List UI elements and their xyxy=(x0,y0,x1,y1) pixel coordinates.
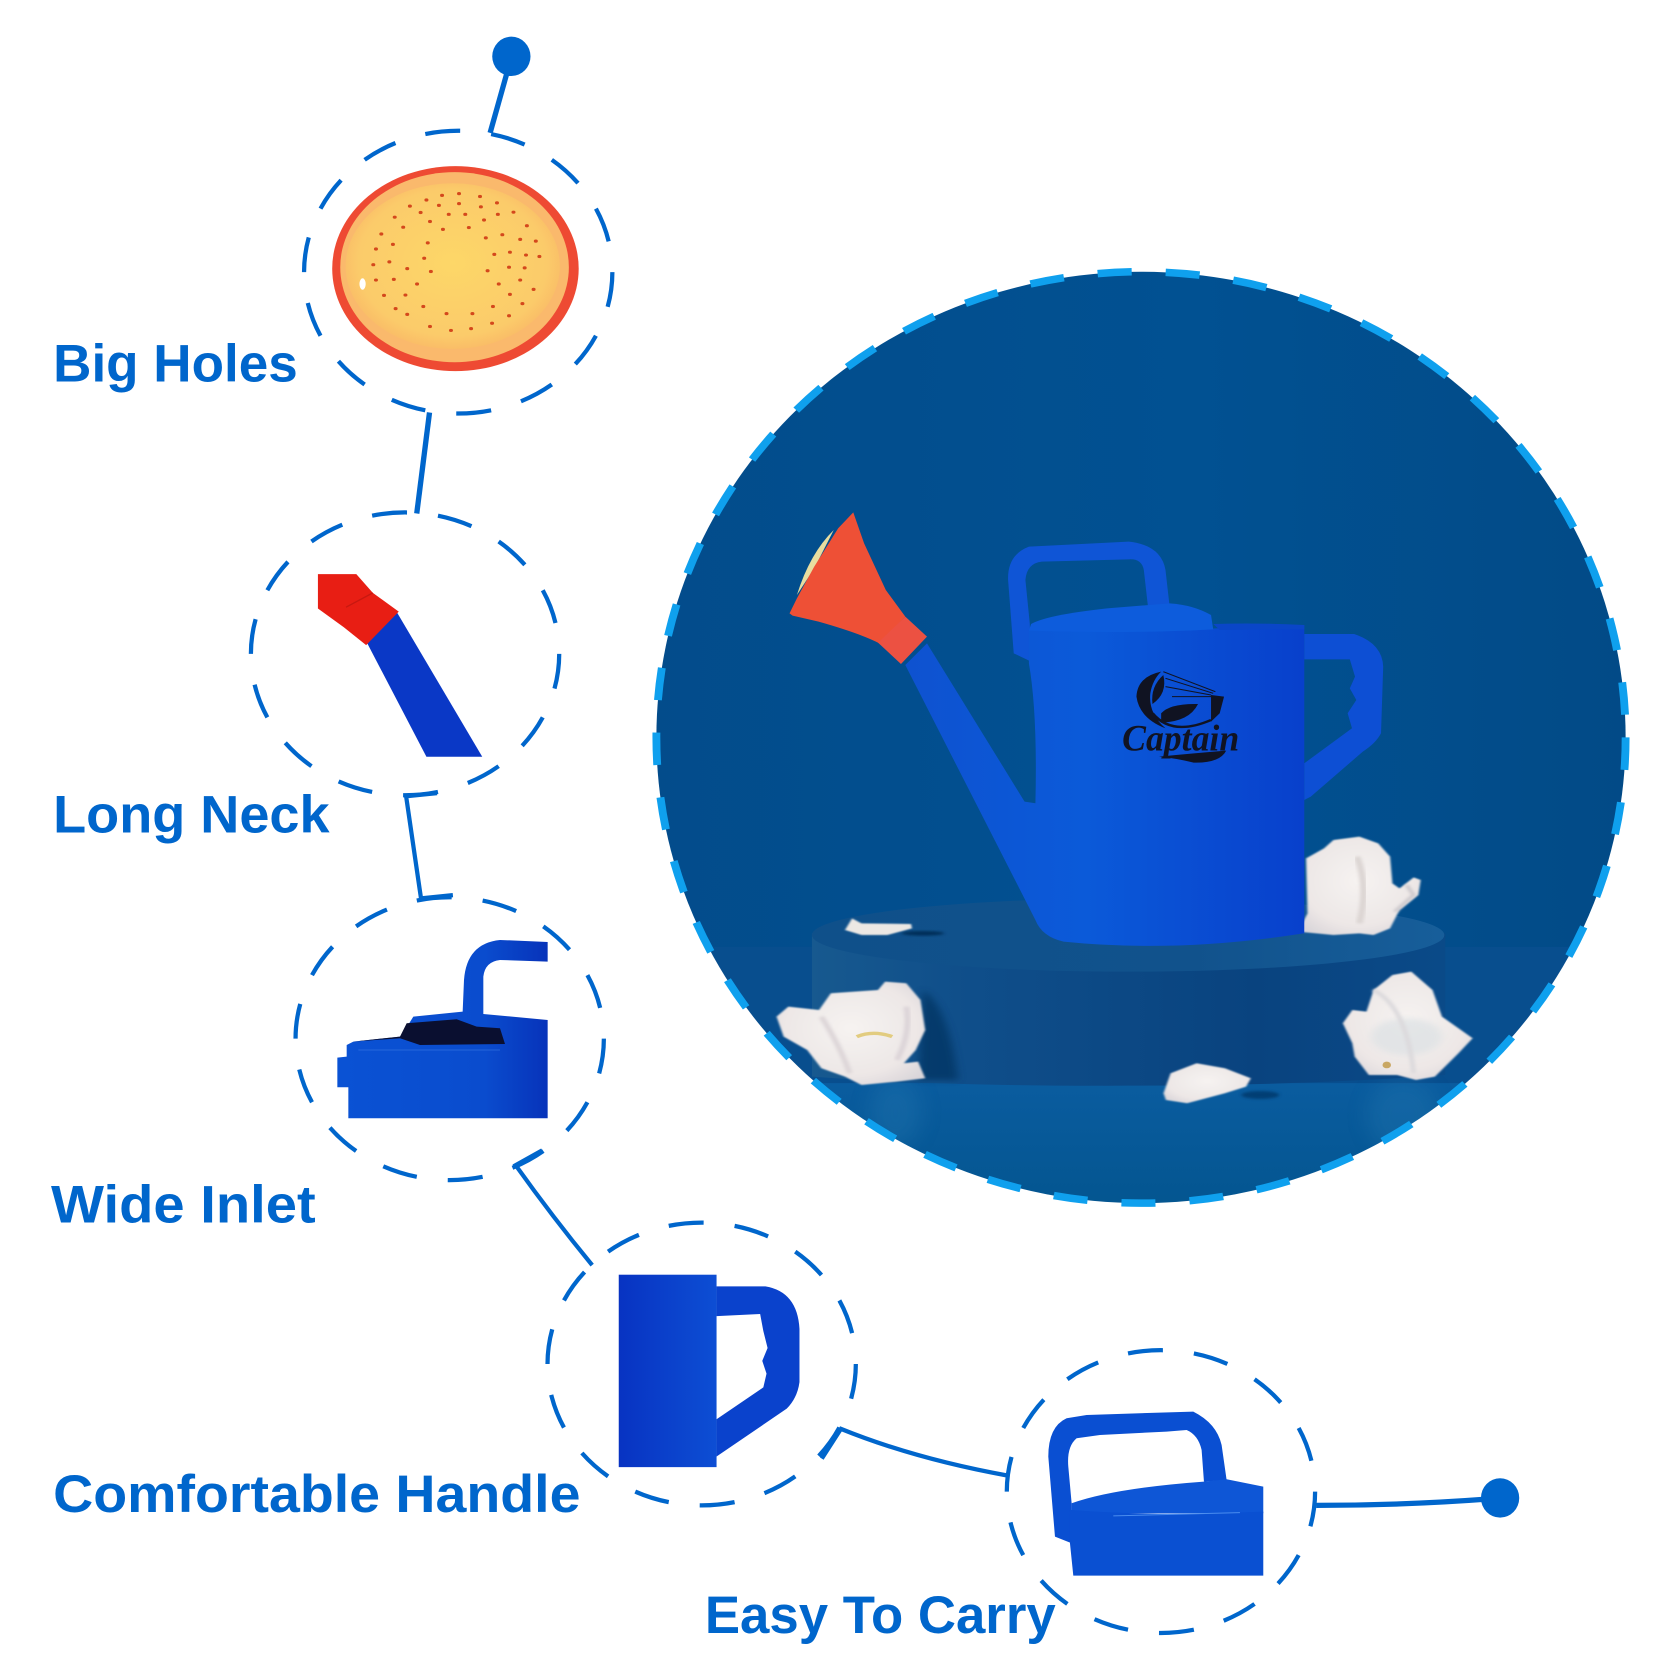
red rose cone xyxy=(790,512,905,643)
label: Wide Inlet xyxy=(51,1176,316,1235)
connector: big holes to long neck xyxy=(417,412,430,513)
inlet opening xyxy=(1213,624,1304,630)
inlet crop xyxy=(337,940,548,1118)
spray holes xyxy=(373,194,539,330)
top pin dot and line xyxy=(490,37,531,133)
dashed ring xyxy=(1007,1350,1315,1633)
photo backdrop xyxy=(640,250,1649,1214)
flower: left xyxy=(777,982,925,1085)
dashed photo border xyxy=(656,272,1626,1203)
end pin dot and line xyxy=(1316,1478,1519,1518)
label: Long Neck xyxy=(53,785,330,844)
spout crop xyxy=(318,574,482,757)
top carry handle xyxy=(1008,542,1170,662)
dashed ring xyxy=(296,897,604,1180)
can body and spout xyxy=(905,625,1304,946)
connector: wide inlet to comfortable handle xyxy=(516,1150,592,1265)
red collar xyxy=(878,617,927,664)
Captain logo: Captain xyxy=(1122,718,1239,759)
rose disk xyxy=(332,166,579,371)
label: Easy To Carry xyxy=(705,1586,1056,1645)
dashed ring xyxy=(251,512,559,795)
main photo: watering can on pedestal xyxy=(640,250,1649,1214)
Captain logo xyxy=(1122,672,1239,763)
pedestal and shading xyxy=(812,898,1445,1099)
yellow rose interior xyxy=(797,530,834,595)
dashed ring xyxy=(304,131,612,414)
feature: easy to carry xyxy=(705,1350,1315,1645)
pedestal shadows xyxy=(902,931,1279,1099)
side handle xyxy=(1304,634,1383,800)
handle crop xyxy=(619,1275,799,1467)
feature: long neck xyxy=(53,512,559,844)
watering can xyxy=(790,512,1383,946)
pedestal top xyxy=(812,898,1444,972)
feature: wide inlet xyxy=(51,897,604,1235)
fallen petal: on pedestal xyxy=(845,918,912,935)
flower: right xyxy=(1343,972,1473,1080)
carry handle crop xyxy=(1048,1412,1263,1576)
feature: big holes xyxy=(53,131,612,414)
lid xyxy=(1029,603,1213,632)
fallen petal: front xyxy=(1164,1063,1251,1103)
feature: comfortable handle xyxy=(53,1223,856,1524)
flower behind can xyxy=(1298,837,1421,935)
pedestal side xyxy=(812,933,1445,1086)
connector: long neck to wide inlet xyxy=(406,793,453,898)
label: Comfortable Handle xyxy=(53,1465,580,1524)
dashed ring xyxy=(548,1223,856,1505)
connector: comfortable handle to easy to carry xyxy=(822,1429,1008,1476)
label: Big Holes xyxy=(53,335,298,394)
